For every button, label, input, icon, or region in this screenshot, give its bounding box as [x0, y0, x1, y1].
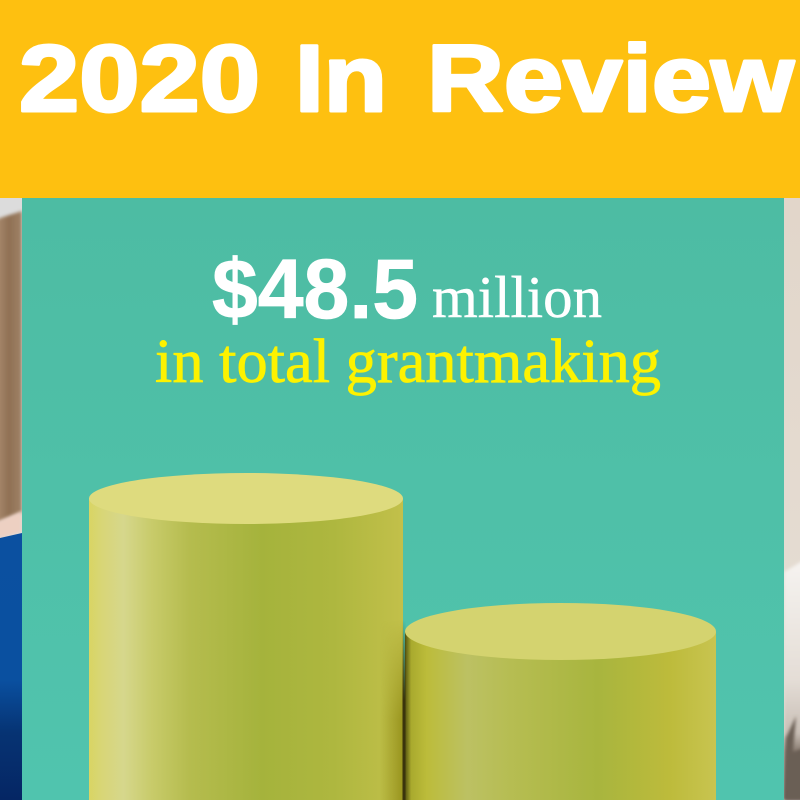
title: Review [427, 26, 795, 132]
title [19, 26, 795, 132]
amount text [212, 242, 602, 336]
photo strip: left person [0, 198, 22, 800]
header band [0, 0, 800, 198]
title: In [295, 26, 387, 132]
amount text: million [432, 264, 602, 330]
photo strip: right person [784, 198, 800, 800]
amount text: $48.5 [212, 242, 418, 336]
teal panel [22, 198, 784, 800]
subheading: in total grantmaking [155, 328, 661, 396]
tall podium cylinder [89, 473, 404, 800]
short podium cylinder [402, 603, 716, 800]
title: 2020 [19, 26, 260, 132]
